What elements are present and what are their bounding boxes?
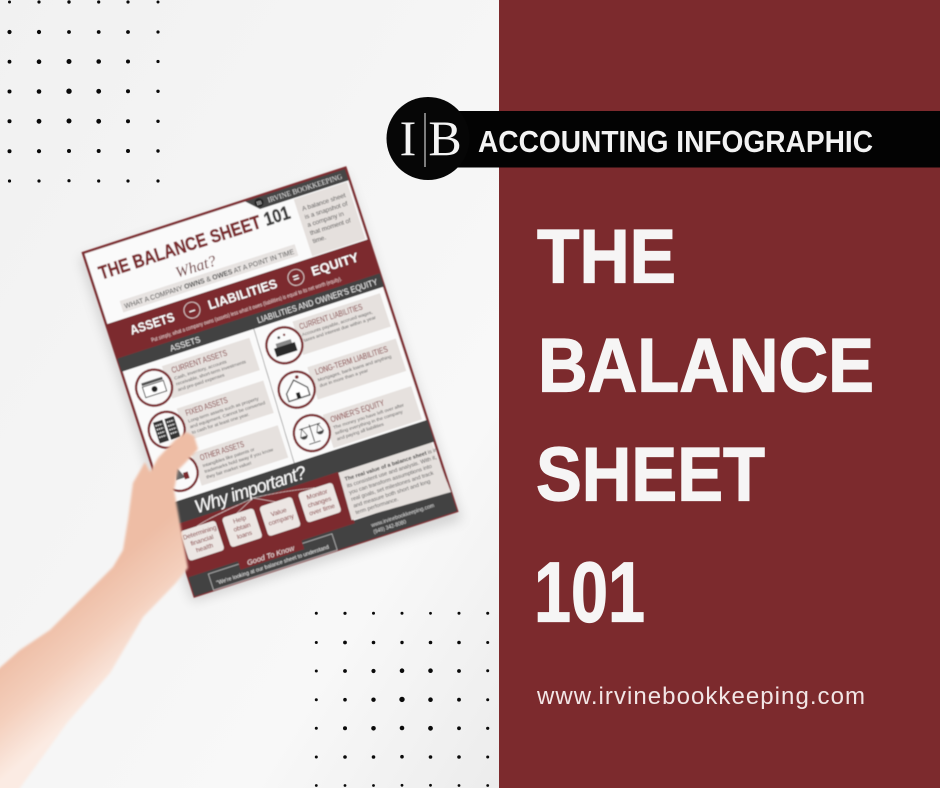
- poster equation band: =: [291, 272, 301, 285]
- reason: help obtain loans: Help: [232, 515, 248, 526]
- card: current assets: Cash, inventory, accounts: [173, 359, 228, 382]
- poster equation band: Put simply, what a company owns (assets) less what it owes (liabilities) is equal to its net worth (equity).: [151, 276, 343, 344]
- card: long-term liabilities: [307, 339, 406, 400]
- poster side note: is a snapshot of: [304, 200, 349, 221]
- card: current liabilities: [292, 293, 391, 355]
- poster footer dark: [187, 489, 457, 596]
- icon: buildings: [144, 407, 189, 452]
- poster good to know box: Good To Know: [246, 543, 296, 567]
- card: current assets: and pre-paid expenses: [177, 372, 226, 393]
- card: owner's equity: OWNER'S EQUITY: [329, 398, 386, 424]
- card: fixed assets: [177, 381, 274, 441]
- card: long-term liabilities: LONG-TERM LIABILITIES: [314, 345, 389, 377]
- poster column divider: [251, 329, 297, 463]
- poster brand tab: IRVINE BOOKKEEPING: [267, 173, 343, 205]
- reason: determining financial health: Determining: [182, 524, 218, 542]
- card: owner's equity: [323, 386, 422, 448]
- card: current liabilities: CURRENT LIABILITIES: [298, 303, 364, 331]
- banner: accounting infographic: ACCOUNTING INFOGRAPHIC: [478, 125, 873, 159]
- poster red reasons panel: [171, 470, 355, 577]
- card: fixed assets: to cash for at least one year.: [191, 412, 250, 436]
- poster title: THE BALANCE SHEET 101: [96, 202, 293, 284]
- poster equation band: ASSETS: [128, 309, 177, 338]
- poster side note: time.: [312, 234, 327, 245]
- poster side note: A balance sheet: [301, 192, 347, 213]
- title: the balance sheet 101: THE: [537, 214, 676, 300]
- poster side note: that moment of: [309, 217, 352, 237]
- title: the balance sheet 101: [534, 214, 874, 640]
- card: current assets: [162, 338, 260, 399]
- card: fixed assets: FIXED ASSETS: [184, 396, 229, 418]
- poster sheet: [83, 168, 457, 596]
- poster equation band: –: [187, 302, 198, 318]
- reason: help obtain loans: [222, 508, 263, 548]
- poster real value note: you can transform assumptions into: [348, 464, 433, 496]
- poster good to know box: "We're looking at our balance sheet to understand: [216, 544, 330, 587]
- card: other assets: [191, 425, 288, 486]
- poster subtitle: What?: What?: [173, 253, 218, 282]
- poster contact details: www.irvinebookkeeping.com: [371, 503, 435, 529]
- card: other assets: Intangibles like patents or: [202, 447, 256, 469]
- icon: document stack: [157, 450, 202, 496]
- card: other assets: they fair market value!: [206, 460, 252, 481]
- card: current assets: CURRENT ASSETS: [170, 349, 228, 375]
- background: light photo wall: [0, 0, 499, 788]
- card: fixed assets: and equipment. Cannot be converted: [189, 400, 266, 430]
- poster real value note: The real value of a balance sheet is in: [344, 447, 438, 483]
- reason: help obtain loans: loans: [236, 529, 254, 541]
- card: long-term liabilities: due in more than a year: [319, 368, 369, 389]
- reason: monitor changes over time: [298, 482, 342, 523]
- website url: www.irvinebookkeeping.com: [536, 683, 865, 710]
- poster why important band: Why important?: [192, 462, 309, 517]
- poster real value note: and measure both short and long: [353, 479, 431, 510]
- poster real value note: its consistent use and analysis. With it,: [346, 455, 438, 490]
- poster equation band: LIABILITIES: [206, 276, 279, 312]
- poster equation band: EQUITY: [309, 249, 361, 279]
- card: owner's equity: and paying all liabilities: [336, 421, 385, 442]
- poster real value note: [337, 441, 453, 524]
- icon: cash register: [262, 323, 307, 368]
- panel: dark red right side: [499, 0, 940, 788]
- logo badge: IB monogram: I: [400, 110, 416, 166]
- card: current liabilities: taxes and interest due within a year: [303, 315, 377, 344]
- reason: value company: company: [268, 513, 296, 528]
- photo: hand and arm holding the poster: [0, 432, 198, 788]
- reason: value company: Value: [270, 507, 288, 519]
- poster definition strip: WHAT A COMPANY OWNS & OWES AT A POINT IN TIME: [124, 249, 295, 311]
- card: fixed assets: Long-term assets such as property: [187, 396, 260, 425]
- card: current liabilities: Accounts payable, accrued wages,: [301, 310, 374, 338]
- poster drop shadow: [80, 172, 462, 602]
- reason: monitor changes over time: changes: [307, 495, 333, 510]
- reason: value company: [259, 497, 301, 536]
- poster real value note: real goals, set milestones and track: [351, 471, 435, 503]
- title: the balance sheet 101: SHEET: [536, 432, 765, 518]
- card: long-term liabilities: Mortgages, bank loans and anything: [317, 354, 393, 383]
- icon: house: [274, 367, 319, 412]
- card: owner's equity: selling everything in the company: [334, 409, 404, 437]
- reason: monitor changes over time: Monitor: [306, 488, 329, 502]
- title: the balance sheet 101: BALANCE: [538, 324, 874, 408]
- poster equation band: [106, 239, 380, 359]
- poster side note: [294, 182, 366, 256]
- icon: cash bills: [131, 365, 177, 410]
- dot grid: bottom right of photo: [315, 612, 489, 787]
- logo badge: IB monogram: B: [428, 110, 462, 166]
- card: other assets: OTHER ASSETS: [199, 440, 245, 463]
- reason: determining financial health: [180, 520, 225, 561]
- reason: determining financial health: health: [195, 542, 215, 554]
- reason: help obtain loans: obtain: [233, 522, 252, 534]
- poster brand tab: IB: [256, 201, 263, 207]
- poster side note: a company in: [306, 211, 345, 229]
- card: owner's equity: The money you have left over after: [332, 402, 405, 431]
- icon: scales: [289, 410, 335, 456]
- poster brand tab: [245, 169, 349, 213]
- poster good to know box: [207, 530, 337, 590]
- title: the balance sheet 101: 101: [534, 546, 645, 640]
- poster real value note: term performance.: [355, 497, 400, 516]
- card: current assets: receivable, short-term investments: [175, 359, 247, 387]
- poster why important band: [165, 420, 434, 527]
- poster contact details: (949) 342-8080: [373, 519, 407, 536]
- reason: determining financial health: financial: [190, 534, 215, 548]
- banner: accounting infographic: [440, 111, 940, 168]
- card: other assets: trademarks hold sway if you know: [204, 447, 275, 475]
- reason: monitor changes over time: over time: [308, 503, 336, 518]
- poster column header band: [117, 273, 384, 372]
- logo badge: IB monogram: [386, 97, 470, 180]
- dot grid: top left: [7, 0, 160, 183]
- poster: balance sheet 101 infographic, tilted: [83, 167, 459, 596]
- poster column header band: ASSETS: [169, 335, 202, 354]
- poster column header band: LIABILITIES AND OWNER'S EQUITY: [256, 277, 379, 325]
